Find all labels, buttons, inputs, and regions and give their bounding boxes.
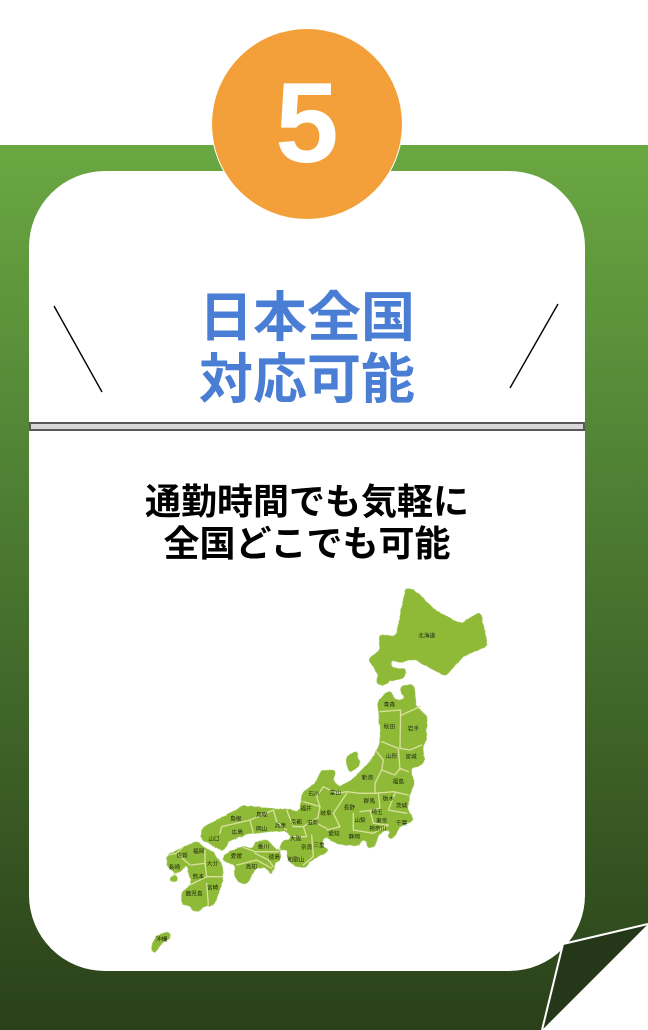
- prefecture names: 福島: [393, 777, 404, 785]
- prefecture names: 島根: [230, 814, 242, 822]
- prefecture names: 滋賀: [307, 818, 319, 826]
- prefecture names: 兵庫: [275, 822, 286, 830]
- Goto islands: [170, 876, 177, 882]
- prefecture names: 山口: [208, 834, 220, 842]
- Hokkaido: [369, 588, 487, 684]
- prefecture names: 熊本: [193, 873, 204, 881]
- prefecture names: 石川: [308, 791, 320, 798]
- prefecture names: 群馬: [364, 797, 375, 805]
- prefecture names: 秋田: [384, 722, 395, 730]
- Okinawa: [152, 933, 170, 952]
- prefecture names: 長野: [344, 803, 355, 811]
- subheading text: 通勤時間でも気軽に: [145, 481, 469, 522]
- Shikoku: [223, 841, 280, 883]
- prefecture names: 三重: [313, 841, 325, 849]
- prefecture names: 沖縄: [156, 935, 168, 943]
- prefecture names: 香川: [258, 842, 269, 850]
- white rounded card: [29, 171, 585, 971]
- Honshu: [202, 686, 426, 867]
- prefecture names: 大阪: [290, 834, 302, 842]
- prefecture names: 徳島: [269, 853, 280, 861]
- prefecture borders: [168, 707, 422, 905]
- number badge: 5: 5: [275, 60, 339, 187]
- heading: 日本全国対応可能: 日本全国: [199, 288, 415, 348]
- prefecture names: 茨城: [396, 801, 408, 809]
- prefecture names: 愛知: [328, 829, 340, 837]
- prefecture names: 大分: [207, 860, 218, 868]
- Sado island: [347, 752, 360, 772]
- prefecture names: 鳥取: [256, 810, 268, 818]
- number badge: 5: [211, 28, 403, 220]
- prefecture names: 北海道: [418, 632, 435, 640]
- prefecture names: 奈良: [301, 843, 313, 851]
- prefecture names: 千葉: [396, 819, 408, 827]
- subheading text: 全国どこでも可能: [164, 523, 450, 564]
- prefecture names: [156, 632, 435, 943]
- heading: 日本全国対応可能: [199, 288, 415, 410]
- prefecture names: 京都: [291, 818, 302, 826]
- prefecture names: 山形: [386, 752, 398, 760]
- prefecture names: 富山: [330, 789, 341, 797]
- prefecture names: 岡山: [256, 824, 268, 832]
- prefecture names: 静岡: [349, 832, 360, 840]
- prefecture names: 鹿児島: [186, 890, 203, 898]
- prefecture names: 岐阜: [320, 809, 332, 817]
- prefecture names: 岩手: [408, 725, 419, 733]
- prefecture names: 東京: [376, 816, 388, 824]
- prefecture names: 愛媛: [231, 852, 242, 860]
- prefecture names: 新潟: [362, 774, 373, 782]
- prefecture names: 佐賀: [176, 851, 188, 859]
- prefecture names: 宮崎: [207, 883, 219, 891]
- land masses: [152, 588, 487, 952]
- prefecture names: 広島: [232, 828, 243, 836]
- heading: 日本全国対応可能: 対応可能: [199, 350, 415, 410]
- prefecture names: 長崎: [169, 863, 180, 871]
- prefecture names: 栃木: [383, 795, 394, 803]
- prefecture names: 青森: [384, 701, 395, 709]
- prefecture names: 福井: [300, 804, 312, 812]
- prefecture names: 高知: [246, 862, 257, 870]
- prefecture names: 埼玉: [371, 808, 383, 816]
- Kyushu: [167, 842, 222, 911]
- divider bar: [29, 422, 585, 431]
- prefecture names: 山梨: [354, 816, 366, 824]
- prefecture names: 福岡: [193, 847, 205, 855]
- prefecture names: 神奈川: [369, 825, 386, 833]
- prefecture names: 和歌山: [288, 856, 305, 864]
- prefecture names: 宮城: [405, 753, 417, 761]
- subheading text: [145, 481, 469, 564]
- Awaji island: [280, 840, 290, 849]
